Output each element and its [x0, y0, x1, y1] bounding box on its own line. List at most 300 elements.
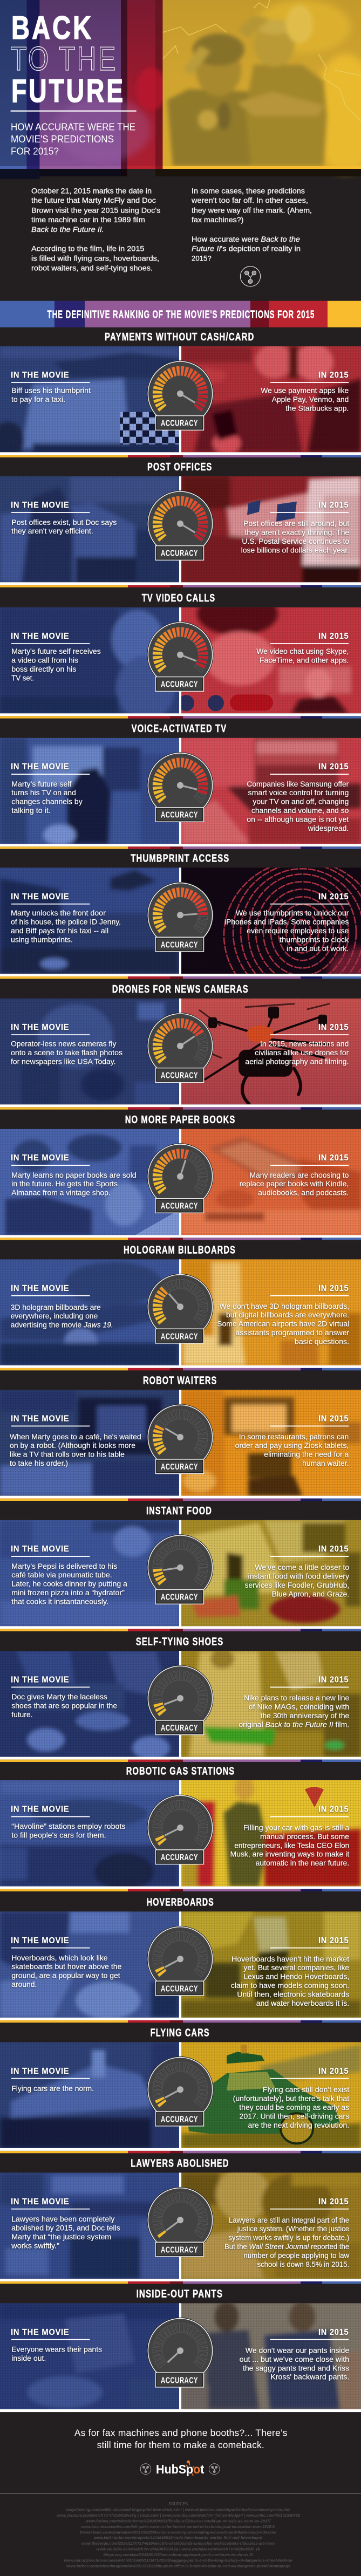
in the movie text — [11, 2328, 102, 2362]
accuracy gauge: 3 lit: ACCURACY — [161, 1724, 198, 1733]
in 2015 text: assistants programmed to answer — [235, 1329, 350, 1337]
photo: meal delivery box — [181, 1520, 361, 1627]
sources: www.theverge.com/2014/11/7/7174639/electric-skateboards-unicycles-and-scooters-rideables-are-here — [81, 2541, 275, 2546]
in the movie text: changes channels by — [11, 798, 83, 806]
in 2015 text: In 2015, news stations and — [260, 1040, 349, 1048]
hero panel — [0, 0, 361, 179]
hubspot logo: HubSpot — [156, 2462, 205, 2476]
in the movie text: abolished by 2015, and Doc tells — [11, 2224, 120, 2232]
photo: hill valley street — [0, 867, 179, 974]
in the movie text: that cooks it instantaneously. — [11, 1597, 108, 1605]
in 2015 text: they could be coming as early as — [239, 2103, 350, 2112]
in 2015 text: IN 2015 — [318, 2328, 349, 2337]
in 2015 text: your TV on and off, changing — [253, 798, 349, 806]
sources: www.businessinsider.com/bill-gates-were-in-the-fastest-period-of-technological-innovation-ever-2015-6 — [81, 2524, 275, 2529]
intro text: left column: According to the film, life in 2015 — [31, 245, 145, 252]
in the movie text: boss directly on his — [11, 665, 77, 673]
in the movie text: ground, are a popular way to get — [11, 1972, 120, 1980]
in the movie text: to fill people's cars for them. — [11, 1832, 106, 1840]
accuracy gauge: 1 lit — [148, 2188, 213, 2257]
icon: sprocket — [186, 2461, 194, 2476]
panel: voice-activated tv — [0, 723, 361, 849]
sources: www.youtube.com/watch?v=gMaDhkNJA2g | www.youtube.com/watch?v=Wzbc8X9I_yk — [97, 2547, 261, 2552]
in 2015 text: Flying cars still don't exist — [263, 2086, 349, 2094]
in the movie text: Marty's future self receives — [11, 647, 101, 655]
sources: www.youtube.com/watch?v=thOxW19vaTg | ziosk.com | www.youtube.com/watch?v=jmhzAANUgs4 | www.cnbc.com/id/102330455 — [56, 2513, 301, 2518]
in the movie text: IN THE MOVIE — [11, 1936, 69, 1945]
in 2015 text: Some American airports have 2D virtual — [217, 1320, 349, 1328]
in the movie text — [11, 1153, 136, 1197]
in 2015 text: Until then, electronic skateboards — [237, 1990, 350, 1998]
panel: robotic gas stations: ROBOTIC GAS STATIONS — [126, 1765, 235, 1777]
in 2015 text: IN 2015 — [318, 2067, 349, 2076]
accuracy gauge: 1 lit: ACCURACY — [161, 2245, 198, 2254]
in the movie text: Lawyers have been completely — [11, 2215, 115, 2223]
in 2015 text: Lexus and Hendo Hoverboards, — [243, 1973, 349, 1981]
in the movie text: TV set. — [11, 674, 34, 682]
in the movie text — [11, 1284, 113, 1329]
intro text: right column: In some cases, these predictions — [192, 187, 305, 195]
in the movie text: IN THE MOVIE — [11, 501, 69, 510]
in the movie text: skateboards but hover above the — [11, 1963, 121, 1971]
in 2015 text — [230, 1805, 350, 1867]
in the movie text: in the future. He gets the Sports — [11, 1180, 118, 1188]
sources — [56, 2502, 301, 2568]
in 2015 text: Kross' backward pants. — [270, 2373, 349, 2381]
in 2015 text: IN 2015 — [318, 1023, 349, 1032]
intro text: right column: How accurate were Back to the — [192, 235, 300, 243]
icon: flux capacitor — [240, 267, 261, 286]
intro text: left column — [31, 187, 161, 272]
hero bottom stripe — [0, 166, 361, 179]
photo: tv screen — [0, 607, 179, 721]
in the movie text: café table via pneumatic tube. — [11, 1571, 112, 1579]
in the movie text: IN THE MOVIE — [11, 1805, 69, 1814]
in 2015 text: 2017. Until then, self-driving cars — [240, 2112, 350, 2120]
in the movie text: Flying cars are the norm. — [11, 2085, 94, 2093]
in 2015 text: human waiter. — [302, 1459, 349, 1467]
closing text: still time for them to make a comeback. — [97, 2440, 264, 2450]
in the movie text: IN THE MOVIE — [11, 1415, 69, 1423]
title: FUTURE — [11, 73, 125, 109]
in the movie text: on by a robot. (Although it looks more — [10, 1441, 135, 1450]
in the movie text: Later, he cooks dinner by putting a — [11, 1580, 127, 1588]
in 2015 text: even require employees to use — [247, 927, 349, 935]
in 2015 text — [256, 632, 349, 665]
accuracy gauge: 2 lit — [148, 1927, 213, 1996]
photo: fingerprint — [181, 867, 361, 974]
in the movie text: Doc gives Marty the laceless — [11, 1693, 107, 1701]
in 2015 text: IN 2015 — [318, 371, 349, 380]
in 2015 text: services like Foodler, GrubHub, — [245, 1581, 349, 1589]
in the movie text: using thumbprints. — [11, 935, 73, 944]
accuracy gauge: 2 lit: ACCURACY — [161, 2115, 198, 2124]
in 2015 text: We don't have 3D hologram billboards, — [220, 1302, 349, 1310]
in the movie text: turns his TV on and — [11, 789, 76, 797]
in the movie text: of his house, the police ID Jenny, — [11, 918, 121, 926]
in the movie text: around. — [11, 1980, 37, 1989]
in 2015 text — [217, 1284, 350, 1345]
in 2015 text — [235, 1415, 349, 1467]
in 2015 text: IN 2015 — [318, 501, 349, 510]
title — [11, 10, 125, 109]
photo: ziosk tablet — [181, 1390, 361, 1496]
photo: drone — [181, 999, 361, 1105]
in the movie text: IN THE MOVIE — [11, 1676, 69, 1684]
in the movie text: to take his order.) — [10, 1459, 68, 1467]
in 2015 text: Hoverboards haven't hit the market — [231, 1955, 349, 1963]
in 2015 text: are the next driving revolution. — [248, 2121, 349, 2129]
in the movie text: to pay for a taxi. — [11, 395, 65, 404]
in the movie text: IN THE MOVIE — [11, 371, 69, 380]
in the movie text: Marty unlocks the front door — [11, 909, 106, 917]
in 2015 text: automatic in the near future. — [256, 1859, 349, 1867]
hero photo: Marty and Doc — [162, 0, 361, 173]
title: BACK — [11, 10, 93, 46]
panel: robot waiters — [0, 1375, 361, 1501]
panel: instant food — [0, 1505, 361, 1631]
in 2015 text: replace paper books with Kindle, — [240, 1180, 349, 1188]
in 2015 text: But the Wall Street Journal reported the — [224, 2243, 349, 2251]
photo: kindle — [181, 1129, 361, 1235]
panel: tv video calls — [0, 592, 361, 721]
in 2015 text: IN 2015 — [318, 1153, 349, 1163]
in 2015 text: IN 2015 — [318, 1805, 349, 1814]
in the movie text — [11, 2197, 120, 2250]
title: TO THE — [11, 40, 118, 78]
sources: www.forbes.com/sites/ericmack/2015/03/16/finally-a-flying-car-could-go-on-sale-as-soon-as-2017/ — [86, 2518, 271, 2523]
panel: no more paper books — [0, 1114, 361, 1240]
in the movie text — [11, 1676, 117, 1719]
accuracy gauge: all lit — [148, 361, 213, 430]
photo: marty on hoverboard — [0, 1911, 179, 2019]
in the movie text — [10, 1415, 141, 1467]
in the movie text: Hoverboards, which look like — [11, 1954, 108, 1962]
photo: usa today newspaper — [0, 2172, 179, 2279]
accuracy gauge: none lit: ACCURACY — [161, 2376, 198, 2385]
in 2015 text: IN 2015 — [318, 1284, 349, 1293]
in 2015 text: We use thumbprints to unlock our — [236, 909, 349, 917]
photo: future living room — [0, 738, 179, 846]
panel: robotic gas stations — [0, 1765, 361, 1891]
in 2015 text — [224, 892, 349, 953]
in the movie text: IN THE MOVIE — [11, 2197, 69, 2206]
accuracy gauge: 7 lit — [148, 1405, 213, 1474]
in the movie text: Marty learns no paper books are sold — [11, 1171, 136, 1179]
in 2015 text: claim to have models coming soon. — [231, 1981, 349, 1990]
panel: lawyers abolished: LAWYERS ABOLISHED — [131, 2158, 229, 2170]
photo: mailbox — [0, 476, 179, 583]
sources: blogs.wsj.com/law/2015/01/15/law-school-applicant-pool-continues-to-shrink-2/ — [104, 2552, 254, 2557]
in 2015 text: eliminating the need for a — [264, 1451, 349, 1459]
in 2015 text: Companies like Samsung offer — [247, 780, 349, 788]
in the movie text: for newspapers like USA Today. — [11, 1057, 115, 1065]
intro text: right column — [191, 187, 312, 262]
in 2015 text — [247, 762, 349, 832]
in the movie text: When Marty goes to a café, he's waited — [10, 1433, 141, 1441]
accuracy gauge: 2 lit — [148, 1795, 213, 1864]
accuracy gauge: 22 lit — [148, 883, 213, 952]
in 2015 text — [241, 501, 349, 554]
in 2015 text: lose billions of dollars each year. — [241, 546, 349, 554]
photo: jaws 19 shark — [0, 1259, 179, 1365]
panel: lawyers abolished — [0, 2158, 361, 2284]
in the movie text: IN THE MOVIE — [11, 892, 69, 901]
in the movie text: advertising the movie Jaws 19. — [11, 1321, 113, 1329]
in 2015 text — [245, 1545, 350, 1598]
accuracy gauge: 4 lit: ACCURACY — [161, 1593, 198, 1602]
accuracy gauge: 25 lit — [148, 623, 213, 691]
in the movie text — [11, 1805, 126, 1840]
in the movie text — [11, 1023, 122, 1065]
ranking banner — [0, 301, 361, 327]
photo: sports almanac — [0, 1129, 179, 1235]
accuracy gauge: 15 lit — [148, 1144, 213, 1213]
in the movie text: 3D hologram billboards are — [11, 1303, 101, 1311]
in 2015 text: widespread. — [308, 824, 349, 832]
photo: nike mags — [0, 1651, 179, 1760]
closing text — [74, 2428, 288, 2450]
in the movie text: Post offices exist, but Doc says — [11, 518, 117, 527]
photo: hoverboard rider — [181, 1911, 361, 2018]
in 2015 text: and water hoverboards it is. — [256, 1999, 349, 2007]
in 2015 text: the saggy pants trend and Kriss — [243, 2364, 349, 2372]
in 2015 text: We use payment apps like — [261, 387, 349, 395]
in 2015 text: IN 2015 — [318, 1415, 349, 1423]
panel: robot waiters: ROBOT WAITERS — [143, 1375, 217, 1386]
hubspot logo — [140, 2461, 220, 2476]
accuracy gauge: 9 lit: ACCURACY — [161, 1332, 198, 1341]
in 2015 text: Post offices are still around, but — [243, 520, 349, 528]
in 2015 text: IN 2015 — [318, 1676, 349, 1684]
in 2015 text: order and pay using Ziosk tablets, — [235, 1441, 349, 1450]
photo: law students — [181, 2167, 361, 2279]
sources: easyclocking.com/ec500-advanced-fingerprint-time-clock.html | www.airportone.com/airportvirtualassistancesystem.htm — [66, 2507, 291, 2512]
photo: cafe robot — [0, 1390, 179, 1496]
in the movie text: Marty's future self — [11, 780, 72, 788]
in the movie text: IN THE MOVIE — [11, 1153, 69, 1163]
accuracy gauge: all lit — [148, 491, 213, 560]
in the movie text: a video call from his — [11, 657, 78, 665]
in 2015 text: entrepreneurs, like Tesla CEO Elon — [234, 1841, 349, 1849]
in 2015 text: aerial photography and filming. — [245, 1057, 349, 1065]
in 2015 text: yet. But several companies, like — [243, 1964, 349, 1972]
subtitle: MOVIE'S PREDICTIONS — [11, 133, 114, 145]
in the movie text — [11, 501, 117, 535]
in the movie text: “Havoline” stations employ robots — [11, 1822, 126, 1830]
photo: news camera crowd — [0, 999, 179, 1105]
in the movie text — [11, 762, 83, 815]
in 2015 text: the 30th anniversary of the — [260, 1712, 349, 1720]
in the movie text: IN THE MOVIE — [11, 2067, 69, 2076]
in 2015 text: system works swiftly is up for debate.) — [228, 2234, 349, 2242]
in 2015 text: instant food with food delivery — [248, 1573, 350, 1581]
photo: tesla charging — [181, 1776, 361, 1887]
photo: shoe lab — [181, 1649, 361, 1757]
in 2015 text — [224, 2197, 350, 2268]
intro text: left column: time machine car in the 1989 film — [31, 216, 145, 224]
in 2015 text: IN 2015 — [318, 632, 349, 641]
in 2015 text: audiobooks, and podcasts. — [258, 1189, 349, 1197]
in 2015 text: iPhones and iPads. Some companies — [224, 918, 349, 926]
intro text: right column: fax machines?) — [192, 216, 243, 224]
in 2015 text: U.S. Postal Service continues to — [242, 537, 349, 545]
in 2015 text — [239, 1676, 349, 1728]
in 2015 text: We've come a little closer to — [255, 1563, 349, 1571]
panel: voice-activated tv: VOICE-ACTIVATED TV — [132, 723, 227, 735]
in 2015 text: basic questions. — [295, 1337, 349, 1345]
sources: www.kickstarter.com/projects/142464853/hendo-hoverboards-worlds-first-real-hoverboard — [94, 2536, 263, 2540]
sources: www.npr.org/sections/codeswitch/2014/09/11/347143588/sagging-pants-and-the-long-history-of-dangerous-street-fashion — [64, 2558, 292, 2563]
in the movie text: works swiftly.” — [11, 2242, 59, 2250]
panel: tv video calls: TV VIDEO CALLS — [142, 592, 215, 604]
panel: hologram billboards — [0, 1245, 361, 1370]
intro text: left column: Brown visit the year 2015 using Doc's — [31, 206, 161, 215]
in 2015 text: justice system. (Whether the justice — [237, 2225, 349, 2233]
intro text: left column: robot waiters, and self-tying shoes. — [31, 264, 153, 272]
in 2015 text: IN 2015 — [318, 1545, 349, 1554]
in the movie text — [11, 1545, 127, 1605]
panel: inside-out pants: INSIDE-OUT PANTS — [137, 2288, 223, 2300]
in 2015 text: but digital billboards are everywhere. — [226, 1311, 349, 1319]
in the movie text — [11, 1936, 121, 1989]
photo: taxi — [0, 346, 179, 460]
panel: hologram billboards: HOLOGRAM BILLBOARDS — [124, 1245, 236, 1256]
in 2015 text: IN 2015 — [318, 762, 349, 771]
in the movie text: IN THE MOVIE — [11, 2328, 69, 2337]
in the movie text: everywhere, including one — [11, 1312, 98, 1320]
in the movie text: Operator-less news cameras fly — [11, 1040, 117, 1048]
in 2015 text: IN 2015 — [318, 1936, 349, 1945]
photo: couple with phone — [181, 344, 361, 454]
panel: flying cars: FLYING CARS — [151, 2027, 210, 2039]
in 2015 text: IN 2015 — [318, 892, 349, 901]
in the movie text: onto a scene to take flash photos — [11, 1049, 122, 1057]
in 2015 text: Musk, are inventing ways to make it — [230, 1850, 349, 1858]
in 2015 text: they aren't exactly thriving. The — [245, 529, 349, 537]
accuracy gauge: 25 lit: ACCURACY — [161, 680, 198, 689]
in 2015 text: the Starbucks app. — [285, 404, 349, 412]
panel: self-tying shoes — [0, 1636, 361, 1762]
in 2015 text: Many readers are choosing to — [249, 1171, 349, 1179]
panel: drones for news cameras — [0, 983, 361, 1110]
photo: virtual assistant — [181, 1259, 361, 1365]
in the movie text — [11, 371, 91, 404]
in 2015 text: out ... but we've come close with — [240, 2355, 349, 2363]
in the movie text: IN THE MOVIE — [11, 1545, 69, 1554]
in 2015 text: FaceTime, and other apps. — [260, 657, 349, 665]
icon: flux capacitor left — [140, 2464, 151, 2475]
photo: smart tv — [181, 738, 361, 844]
accuracy gauge: 2 lit: ACCURACY — [161, 1984, 198, 1993]
panel: post offices: POST OFFICES — [147, 461, 212, 473]
panel: thumbprint access: THUMBPRINT ACCESS — [131, 853, 229, 865]
accuracy gauge: 4 lit — [148, 1535, 213, 1604]
accuracy gauge: 22 lit: ACCURACY — [161, 940, 198, 949]
panel: flying cars — [0, 2027, 361, 2153]
in the movie text: future. — [11, 1711, 32, 1719]
panel: thumbprint access — [0, 854, 361, 979]
subtitle: HOW ACCURATE WERE THE — [11, 121, 135, 133]
accuracy gauge: 19 lit — [148, 1014, 213, 1082]
photo: google car — [181, 2042, 361, 2148]
accuracy gauge: 3 lit — [148, 1666, 213, 1735]
in the movie text: IN THE MOVIE — [11, 632, 69, 641]
panel: post offices — [0, 461, 361, 587]
in the movie text: talking to it. — [11, 807, 51, 815]
in 2015 text: civilians alike use drones for — [255, 1049, 349, 1057]
in the movie text: shoes that are so popular in the — [11, 1702, 117, 1710]
in 2015 text — [233, 2067, 350, 2129]
intro text: right column: they were way off the mark. (Ahem, — [192, 206, 312, 215]
closing text: As for fax machines and phone booths?... There’s — [74, 2428, 288, 2438]
intro text: left column: is filled with flying cars, hoverboards, — [31, 255, 159, 262]
accuracy gauge: 19 lit: ACCURACY — [161, 1071, 198, 1081]
accuracy gauge: all lit: ACCURACY — [161, 549, 198, 558]
in 2015 text: Filling your car with gas is still a — [243, 1823, 350, 1832]
accuracy gauge: none lit — [148, 2319, 213, 2387]
panel: no more paper books: NO MORE PAPER BOOKS — [125, 1114, 235, 1126]
in 2015 text — [231, 1936, 350, 2007]
accuracy gauge: 24 lit — [148, 753, 213, 822]
in 2015 text — [245, 1023, 349, 1065]
panel: instant food: INSTANT FOOD — [146, 1505, 212, 1517]
accuracy gauge: 7 lit: ACCURACY — [161, 1463, 198, 1472]
accuracy gauge: 9 lit — [148, 1275, 213, 1343]
in the movie text: inside out. — [11, 2354, 46, 2362]
in 2015 text — [240, 2328, 349, 2381]
icon: flux capacitor right — [209, 2464, 220, 2475]
intro text: left column: Back to the Future II. — [31, 226, 104, 234]
hero colour bars — [0, 0, 166, 169]
in the movie text: IN THE MOVIE — [11, 1284, 69, 1293]
in 2015 text: thumbprints to clock — [280, 935, 349, 944]
photo: kriss kross — [181, 2301, 361, 2409]
in 2015 text — [261, 371, 349, 412]
in the movie text: and Biff pays for his taxi -- all — [11, 927, 108, 935]
in the movie text: mini frozen pizza into a “hydrator” — [11, 1589, 125, 1597]
accuracy gauge: 24 lit: ACCURACY — [161, 811, 198, 820]
panel: payments without cash/card — [0, 331, 361, 460]
in the movie text: they aren't very efficient. — [11, 527, 93, 535]
in 2015 text: on -- although usage is not yet — [247, 815, 349, 823]
in the movie text: Marty's Pepsi is delivered to his — [11, 1562, 117, 1570]
accuracy gauge: 2 lit: ACCURACY — [161, 1853, 198, 1862]
in 2015 text: Apple Pay, Venmo, and — [272, 395, 349, 404]
in the movie text — [11, 892, 121, 944]
in the movie text: IN THE MOVIE — [11, 762, 69, 771]
in 2015 text: In some restaurants, patrons can — [239, 1433, 349, 1441]
sources: SOURCES — [168, 2502, 188, 2506]
panel: self-tying shoes: SELF-TYING SHOES — [136, 1636, 223, 1648]
in 2015 text: number of people applying to law — [243, 2251, 350, 2259]
panel: hoverboards: HOVERBOARDS — [147, 1897, 214, 1909]
photo: delorean — [0, 2042, 179, 2148]
in 2015 text: channels and volume, and so — [251, 807, 349, 815]
in the movie text: like a TV that rolls over to his table — [10, 1451, 125, 1459]
in 2015 text: smart voice control for turning — [248, 789, 349, 797]
subtitle: FOR 2015? — [11, 146, 59, 156]
panel: hoverboards — [0, 1897, 361, 2022]
photo: inside-out pants scene — [0, 2303, 179, 2409]
in 2015 text: We video chat using Skype, — [256, 647, 349, 655]
photo: video chat — [181, 607, 361, 713]
sources: www.forbes.com/sites/dougbandow/2013/08/12/the-post-office-is-broke-its-time-to-end-washingtons-postal-monopoly/ — [66, 2564, 291, 2568]
in 2015 text: of Nike MAGs, coinciding with — [249, 1703, 349, 1711]
in the movie text — [11, 632, 101, 682]
in 2015 text: Lawyers are still an integral part of the — [229, 2216, 349, 2224]
in 2015 text: manual process. But some — [260, 1833, 349, 1841]
